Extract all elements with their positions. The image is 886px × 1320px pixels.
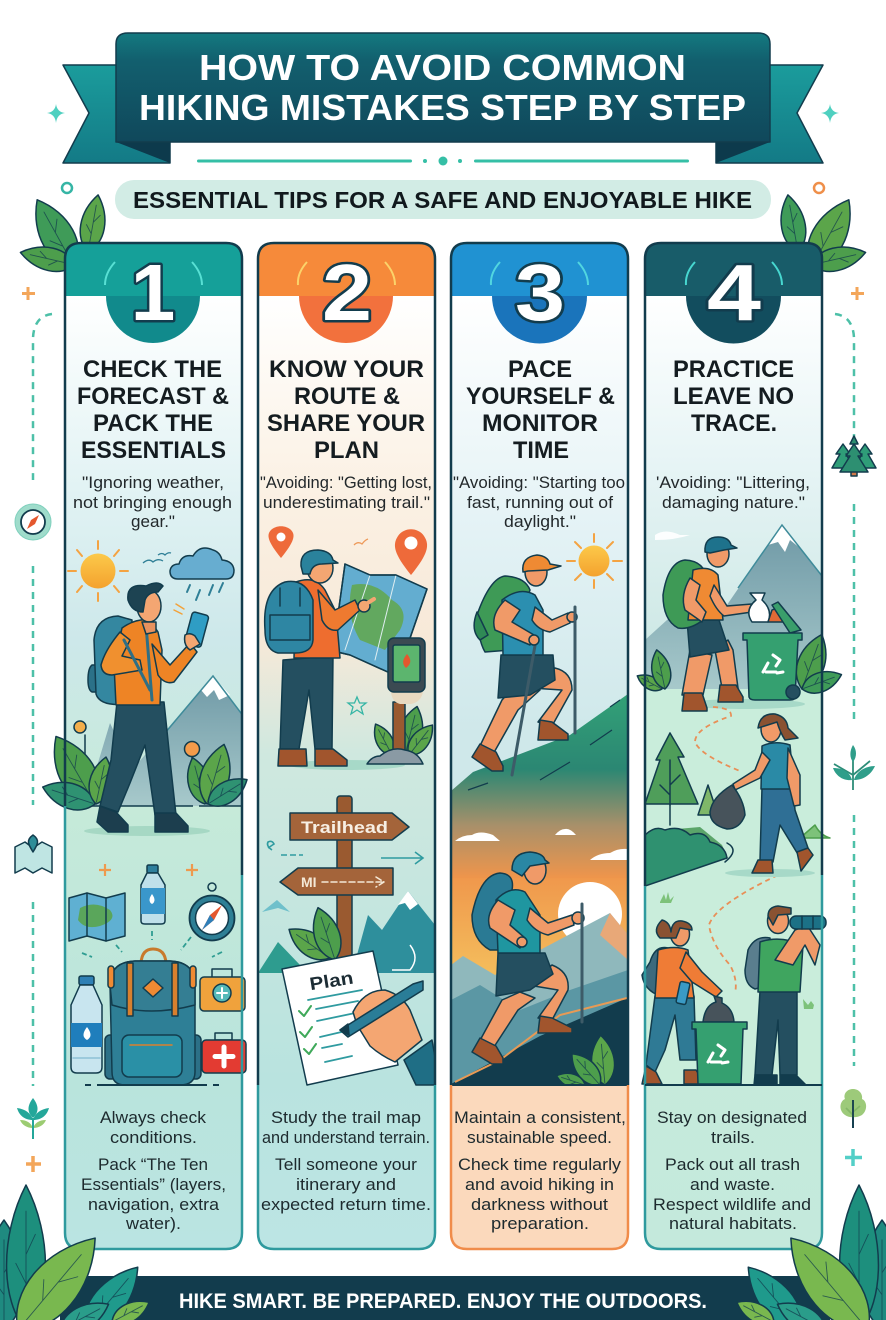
icon: plant left bbox=[17, 1098, 49, 1139]
illustration: woman with bottle bbox=[642, 920, 722, 1084]
illustration: daytime sun bbox=[567, 534, 622, 588]
illustration: compass bbox=[190, 883, 234, 940]
tips text step 1 bbox=[81, 1108, 226, 1233]
ribbon tail left bbox=[63, 65, 170, 163]
illustration: mountain step 4 bbox=[646, 524, 821, 858]
icon: small star bbox=[348, 697, 366, 714]
recycle symbol bin 2 bbox=[708, 1045, 728, 1063]
heading 3 bbox=[466, 356, 615, 464]
dashed trail right bbox=[835, 314, 854, 1066]
mistake quote 2: underestimating trail." bbox=[263, 493, 430, 512]
mistake quote 1: gear." bbox=[131, 512, 175, 531]
ring teal bbox=[62, 183, 72, 193]
sparkle left bbox=[47, 104, 65, 123]
tips text step 2: and understand terrain. bbox=[262, 1128, 430, 1147]
illustration: plan checklist bbox=[282, 951, 398, 1085]
tips text step 2: itinerary and bbox=[296, 1175, 396, 1194]
tips text step 1: conditions. bbox=[110, 1128, 197, 1147]
number badge 1 bbox=[106, 296, 200, 343]
heading 1: PACK THE bbox=[93, 410, 213, 437]
title banner bbox=[63, 33, 823, 163]
illustration: hiker with phone bbox=[84, 583, 210, 836]
leaves top left bbox=[18, 192, 110, 276]
side decorations left bbox=[15, 104, 876, 1172]
illustration: hiker reading map bbox=[265, 550, 427, 770]
mistake quote 4: damaging nature." bbox=[662, 493, 805, 512]
illustration: mountains step 2 bbox=[258, 891, 435, 973]
illustration: sunset foliage bbox=[558, 1036, 614, 1084]
number 2: 2 bbox=[322, 248, 372, 337]
title banner: HIKING MISTAKES STEP BY STEP bbox=[139, 87, 746, 128]
panel: step 1 bbox=[39, 243, 253, 1249]
header band 3 bbox=[451, 243, 628, 296]
illustration: mountains step 1 bbox=[94, 674, 241, 806]
card outlines bbox=[65, 243, 822, 1249]
illustration: big backpack bbox=[105, 949, 201, 1085]
number badge 2 bbox=[299, 296, 393, 343]
tips text step 4: trails. bbox=[711, 1128, 755, 1147]
tips text step 4: Respect wildlife and bbox=[653, 1195, 811, 1214]
header band 4 bbox=[645, 243, 822, 296]
illustration: pine trees and bush bbox=[645, 733, 733, 886]
illustration: writing hand bbox=[340, 981, 440, 1085]
panel: step 4 bbox=[634, 243, 845, 1249]
mistake quote 3: "Avoiding: "Starting too bbox=[453, 473, 625, 492]
sign text miles: MI bbox=[301, 874, 317, 890]
illustration: GPS device on post bbox=[367, 638, 439, 764]
card background 2 bbox=[258, 243, 435, 1249]
number badge 4 bbox=[686, 296, 781, 344]
ground dashes step 1 bbox=[85, 1084, 220, 1086]
recycle symbol bin 1 bbox=[763, 655, 783, 673]
header band 1 bbox=[65, 243, 242, 296]
title text: HOW TO AVOID COMMON bbox=[199, 47, 686, 88]
illustration: man with binoculars bbox=[745, 906, 826, 1085]
tips text step 1: Pack “The Ten bbox=[98, 1155, 208, 1174]
tips text step 1: Always check bbox=[100, 1108, 207, 1127]
illustration: hiker with trash bag bbox=[710, 714, 830, 877]
title divider bbox=[197, 156, 689, 166]
heading 4: PRACTICE bbox=[673, 356, 794, 383]
illustration: plants by bin bbox=[634, 630, 845, 698]
mistake quote 1: "Ignoring weather, bbox=[82, 473, 224, 492]
tips text step 2: Study the trail map bbox=[271, 1108, 421, 1127]
tips text step 3: Maintain a consistent, bbox=[454, 1108, 626, 1127]
mistake quote 3: daylight." bbox=[504, 512, 576, 531]
leaves top right bbox=[776, 192, 868, 276]
header band 2 bbox=[258, 243, 435, 296]
number 4: 4 bbox=[707, 248, 762, 337]
heading 2: KNOW YOUR bbox=[269, 356, 424, 383]
plus orange right bbox=[851, 287, 864, 300]
tips text step 1: water). bbox=[125, 1214, 181, 1233]
card background 1 bbox=[65, 243, 242, 1249]
mistake quote 3: fast, running out of bbox=[467, 493, 613, 512]
card background 3 bbox=[451, 243, 628, 1249]
icon: pine trees right bbox=[832, 436, 876, 476]
illustration: big water bottle bbox=[71, 976, 102, 1073]
mistake quote 4 bbox=[656, 473, 810, 512]
subtitle pill bbox=[115, 180, 771, 219]
tips text step 3: and avoid hiking in bbox=[465, 1175, 614, 1194]
heading 4 bbox=[673, 356, 794, 437]
heading 2: ROUTE & bbox=[294, 383, 400, 410]
tips text step 3: preparation. bbox=[491, 1214, 589, 1233]
mistake quote 1 bbox=[73, 473, 232, 531]
tips text step 2 bbox=[261, 1108, 431, 1214]
heading 3: TIME bbox=[513, 437, 569, 464]
tips text step 3: darkness without bbox=[471, 1195, 608, 1214]
tips text step 1: navigation, extra bbox=[88, 1195, 220, 1214]
heading 4: TRACE. bbox=[691, 410, 777, 437]
panel: step 3 bbox=[451, 243, 628, 1249]
heading 3: PACE bbox=[508, 356, 572, 383]
heading 3: MONITOR bbox=[482, 410, 598, 437]
illustration: packing motion marks bbox=[82, 931, 222, 957]
illustration: dashed orange trail bbox=[695, 707, 778, 993]
plan word: Plan bbox=[308, 968, 355, 994]
illustration: second recycle bin bbox=[692, 996, 747, 1084]
icon: green tree right bbox=[840, 1089, 866, 1128]
tips text step 3: sustainable speed. bbox=[467, 1128, 612, 1147]
heading 2: SHARE YOUR bbox=[267, 410, 425, 437]
heading 2: PLAN bbox=[314, 437, 379, 464]
panel: step 2 bbox=[258, 243, 440, 1249]
illustration: sun and rain cloud bbox=[68, 541, 234, 601]
ribbon tail right bbox=[716, 65, 823, 163]
heading 1: CHECK THE bbox=[83, 356, 222, 383]
heading 1 bbox=[77, 356, 229, 464]
icon: map left bbox=[15, 835, 52, 873]
illustration: sunset scene bbox=[451, 694, 628, 1085]
tips text step 3 bbox=[454, 1108, 626, 1233]
tips text step 2: expected return time. bbox=[261, 1195, 431, 1214]
heading 1: FORECAST & bbox=[77, 383, 229, 410]
plus orange left bbox=[22, 287, 35, 300]
leaves bottom right bbox=[733, 1185, 886, 1320]
mistake quote 2 bbox=[260, 473, 432, 512]
mistake quote 2: "Avoiding: "Getting lost, bbox=[260, 473, 432, 492]
number badge 3 bbox=[492, 296, 587, 344]
tips text step 4: Pack out all trash bbox=[665, 1155, 800, 1174]
footer band: HIKE SMART. BE PREPARED. ENJOY THE OUTDOORS. bbox=[179, 1290, 707, 1313]
illustration: folded map bbox=[69, 893, 125, 941]
illustration: trail signpost bbox=[280, 796, 409, 967]
illustration: climbing hiker dusk bbox=[472, 852, 584, 1064]
illustration: trail hint and arrow bbox=[268, 841, 423, 864]
leaves bottom left bbox=[0, 1185, 153, 1320]
mistake quote 3 bbox=[453, 473, 625, 531]
footer band bbox=[60, 1276, 830, 1320]
illustration: plants step 1 bbox=[39, 721, 253, 816]
tips text step 4 bbox=[653, 1108, 811, 1233]
illustration: ground step 1 bbox=[65, 805, 242, 807]
sign text trailhead: Trailhead bbox=[301, 818, 388, 837]
plus teal right bbox=[845, 1149, 862, 1166]
heading 2 bbox=[267, 356, 425, 464]
subtitle pill: ESSENTIAL TIPS FOR A SAFE AND ENJOYABLE HIKE bbox=[133, 187, 752, 213]
mistake quote 4: 'Avoiding: "Littering, bbox=[656, 473, 810, 492]
heading 4: LEAVE NO bbox=[673, 383, 794, 410]
heading 1: ESSENTIALS bbox=[81, 437, 226, 464]
ribbon body bbox=[116, 33, 770, 142]
card background 4 bbox=[645, 243, 822, 1249]
illustration: gear pluses bbox=[99, 864, 198, 876]
tips text step 4: Stay on designated bbox=[657, 1108, 807, 1127]
bottom panel fill 3 bbox=[451, 1085, 628, 1249]
illustration: red first aid kit bbox=[202, 1033, 246, 1073]
illustration: orange first aid case bbox=[200, 969, 245, 1011]
tips text step 4: natural habitats. bbox=[669, 1214, 797, 1233]
icon: sprig right bbox=[833, 745, 875, 790]
icon: compass left bbox=[15, 504, 51, 540]
mistake quote 1: not bringing enough bbox=[73, 493, 232, 512]
heading 3: YOURSELF & bbox=[466, 383, 615, 410]
tips text step 2: Tell someone your bbox=[275, 1155, 417, 1174]
icon: location pins bbox=[268, 526, 427, 575]
tips text step 1: Essentials” (layers, bbox=[81, 1175, 226, 1194]
illustration: climbing hiker day bbox=[472, 555, 577, 775]
sparkle right bbox=[821, 104, 839, 123]
tips text step 4: and waste. bbox=[690, 1175, 775, 1194]
number 1: 1 bbox=[131, 248, 175, 337]
illustration: hiker with recycle bin bbox=[663, 537, 805, 711]
number 3: 3 bbox=[515, 248, 565, 337]
ring orange bbox=[814, 183, 824, 193]
dashed trail left bbox=[33, 314, 52, 1086]
illustration: small water bottle bbox=[141, 865, 165, 924]
illustration: small grass tufts bbox=[660, 892, 814, 1009]
tips text step 3: Check time regularly bbox=[458, 1155, 622, 1174]
plus orange lower left bbox=[26, 1156, 41, 1172]
